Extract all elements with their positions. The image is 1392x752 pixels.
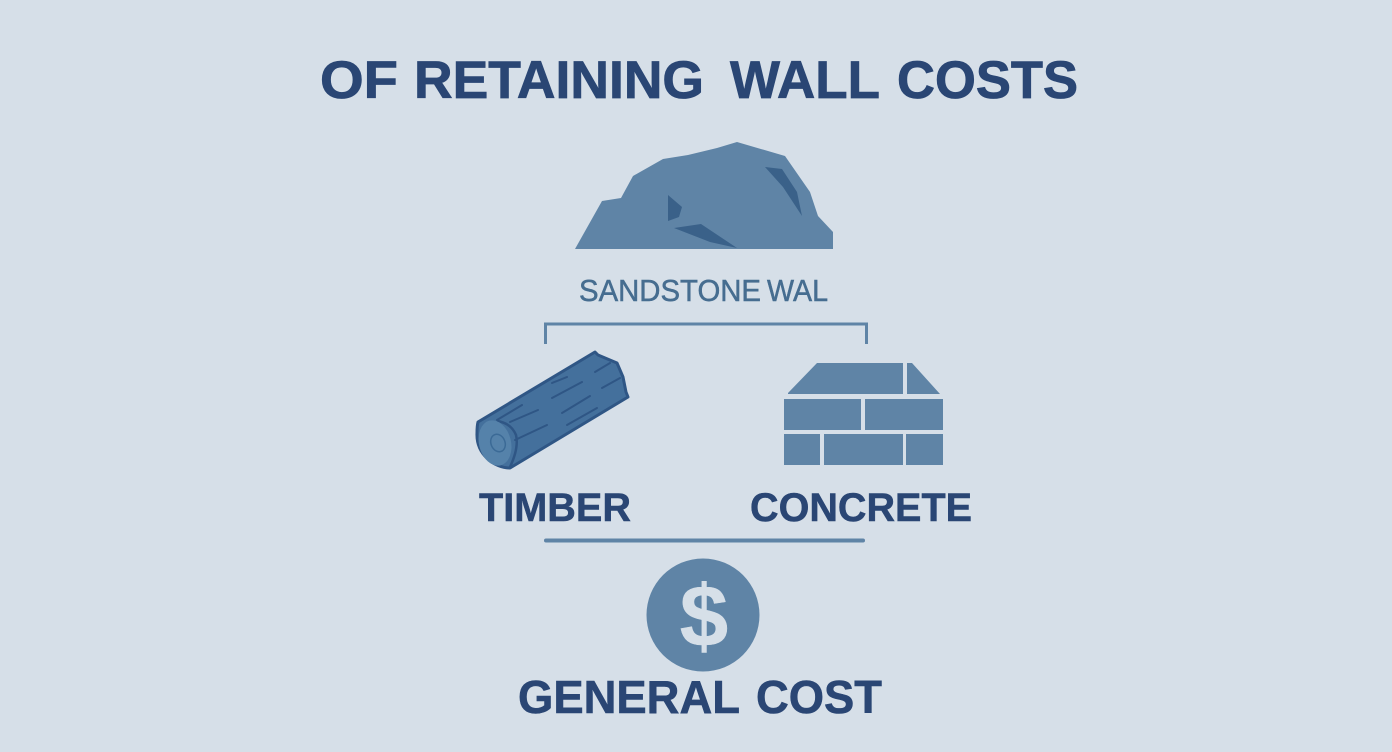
icon: sandstone rock [575, 142, 833, 249]
bracket connector [546, 324, 866, 344]
label: timber: TIMBER [479, 486, 631, 530]
label: general cost: COST [756, 671, 882, 723]
label: concrete: CONCRETE [750, 486, 972, 530]
title: OF [320, 51, 398, 110]
title [320, 51, 1078, 110]
label: general cost: GENERAL [518, 671, 740, 723]
label: general cost [518, 671, 882, 723]
label: sandstone wall: WAL [767, 273, 828, 308]
title: COSTS [897, 51, 1078, 110]
label: sandstone wall: SANDSTONE [579, 273, 761, 308]
divider line [546, 538, 863, 542]
title: WALL [730, 51, 880, 110]
title: RETAINING [414, 51, 704, 110]
icon: timber log [474, 352, 628, 469]
icon: concrete blocks [784, 363, 943, 465]
icon: dollar coin: $ [680, 568, 728, 665]
icon: dollar coin [646, 558, 760, 672]
